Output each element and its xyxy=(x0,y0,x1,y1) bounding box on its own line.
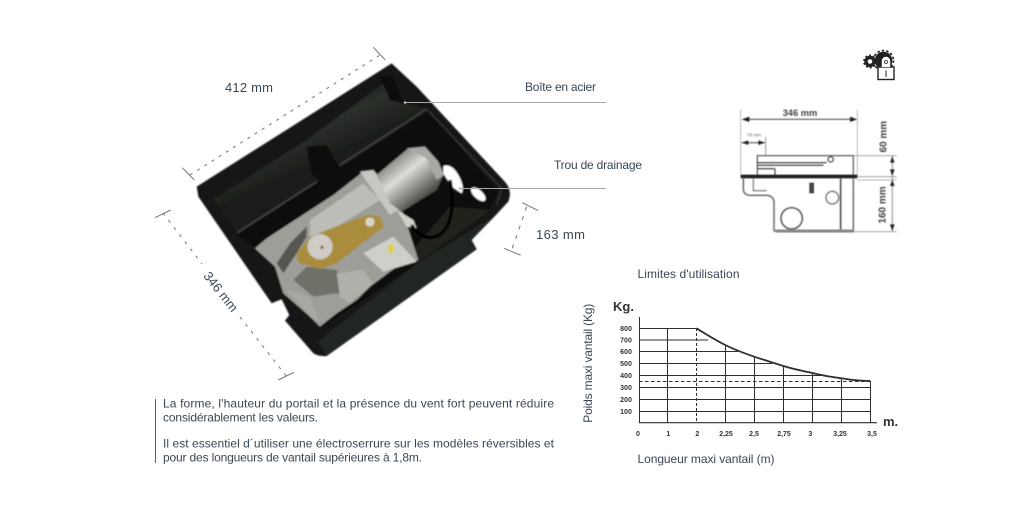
chart: weight vs length: 700 xyxy=(620,338,632,344)
chart: weight vs length: 2,25 xyxy=(719,431,733,438)
chart: weight vs length: 2,5 xyxy=(749,431,759,438)
chart: weight vs length: m. xyxy=(883,414,898,429)
x axis title: Longueur maxi vantail (m) xyxy=(638,452,774,466)
y axis title: Poids maxi vantail (Kg) xyxy=(581,304,595,423)
note text block: considérablement les valeurs. xyxy=(163,410,318,424)
motor cylinder xyxy=(377,148,443,212)
chart: weight vs length: 500 xyxy=(620,361,632,368)
technical drawing: side view: 60 mm xyxy=(878,121,889,152)
chart: weight vs length xyxy=(613,299,898,438)
gearbox xyxy=(255,172,418,327)
chart: weight vs length: 400 xyxy=(620,373,632,380)
callout: Trou de drainage: Trou de drainage xyxy=(554,158,642,172)
chart: weight vs length: 3 xyxy=(808,431,812,438)
dimension: 163 mm xyxy=(504,203,585,255)
callout: Boîte en acier: Boîte en acier xyxy=(525,80,596,94)
drainage hole xyxy=(443,165,488,204)
technical drawing: side view: 346 mm xyxy=(783,108,817,118)
chart: weight vs length: 600 xyxy=(620,349,632,356)
gold arm xyxy=(297,215,384,269)
icon: gear and padlock xyxy=(864,50,894,80)
chart: weight vs length: 0 xyxy=(636,431,640,438)
technical drawing: side view: 78 mm xyxy=(747,133,761,138)
dimension: 412 mm xyxy=(182,47,385,180)
chart: weight vs length: 100 xyxy=(620,409,632,416)
technical drawing: side view xyxy=(741,108,897,232)
technical drawing: side view: 160 mm xyxy=(878,186,889,224)
cable xyxy=(412,180,452,238)
chart: weight vs length: 800 xyxy=(620,326,632,333)
chart: weight vs length: 3,25 xyxy=(833,431,847,438)
chart: weight vs length: 300 xyxy=(620,385,632,392)
note text block: pour des longueurs de vantail supérieures à 1,8m. xyxy=(163,450,422,464)
chart: weight vs length: Kg. xyxy=(613,299,634,314)
dimension: 412 mm: 412 mm xyxy=(225,80,273,95)
note text block xyxy=(156,396,555,464)
note text block: La forme, l'hauteur du portail et la présence du vent fort peuvent réduire xyxy=(163,396,554,410)
note text block: Il est essentiel d´utiliser une électroserrure sur les modèles réversibles et xyxy=(163,436,555,450)
dimension: 163 mm: 163 mm xyxy=(536,227,585,242)
chart: weight vs length: 200 xyxy=(620,397,632,404)
chart: weight vs length: 3,5 xyxy=(867,431,877,438)
chart: weight vs length: 2,75 xyxy=(777,431,791,438)
chart: weight vs length: 1 xyxy=(666,431,670,438)
chart: weight vs length: 2 xyxy=(695,431,699,438)
product photo: motor in steel box xyxy=(197,63,510,356)
dimension: 346 mm xyxy=(155,210,294,380)
heading: Limites d'utilisation: Limites d'utilisation xyxy=(638,267,740,281)
dimension: 346 mm: 346 mm xyxy=(201,269,241,315)
